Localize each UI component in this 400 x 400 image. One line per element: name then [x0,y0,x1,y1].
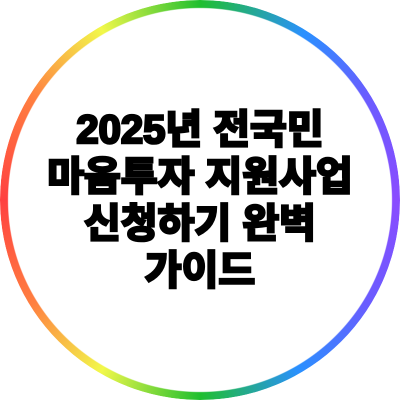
title: 신청하기 완벽 [84,202,316,246]
title: 가이드 [145,249,255,293]
title: 2025년 전국민 [76,108,324,152]
title [47,108,353,293]
title: 마음투자 지원사업 [47,155,353,199]
